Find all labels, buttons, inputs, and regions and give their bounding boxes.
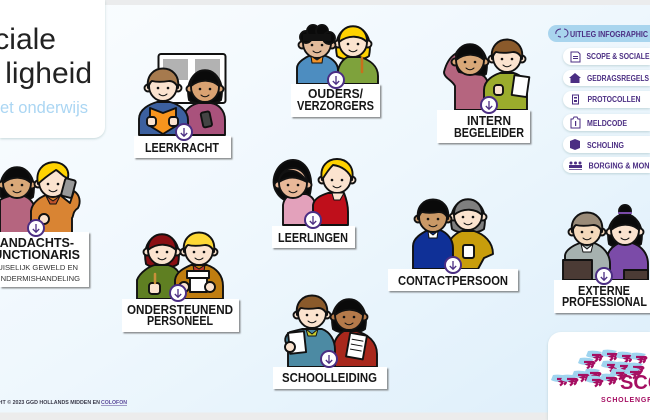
- group: ouders: [297, 25, 378, 84]
- person: woman bun: [606, 205, 648, 280]
- nav: uitleg infographic: [548, 25, 650, 42]
- icon: arrow leerlingen: [305, 212, 321, 228]
- label: ouders: VERZORGERS: [297, 99, 374, 113]
- person: woman: [0, 167, 36, 233]
- group: aandachtsfunctionaris: [0, 162, 80, 233]
- title: ligheid: [5, 57, 92, 90]
- label: ondersteunend personeel: [122, 299, 239, 332]
- person: woman grey hair: [450, 199, 493, 269]
- person: boy: [313, 159, 356, 225]
- label: leerlingen: [272, 226, 355, 248]
- heading: [0, 236, 80, 262]
- label: aandachtsfunctionaris: [0, 232, 89, 287]
- nav: scholing: SCHOLING: [587, 141, 624, 150]
- icon: arrow schoolleiding: [321, 351, 337, 367]
- label: leerlingen: LEERLINGEN: [278, 231, 348, 245]
- top band: [100, 0, 650, 5]
- nav: scholing: [563, 136, 650, 153]
- nav: gedragsregels: [563, 70, 650, 86]
- logo card: [548, 332, 650, 420]
- subtitle: et onderwijs: [0, 99, 88, 117]
- label: leerkracht: LEERKRACHT: [145, 141, 219, 155]
- label: intern begeleider: INTERN: [467, 114, 511, 128]
- label: intern begeleider: BEGELEIDER: [454, 126, 524, 140]
- nav: scope: [563, 48, 650, 65]
- group: schoolleiding: [285, 296, 377, 367]
- label: externe professional: [554, 280, 650, 313]
- icon: arrow aandachtsfunctionaris: [28, 220, 44, 236]
- navigation menu: [548, 25, 650, 173]
- label: ouders: [291, 84, 380, 117]
- group: contactpersoon: [413, 199, 493, 269]
- person: man: [285, 296, 335, 367]
- icon: arrow leerkracht: [176, 124, 192, 140]
- person: begeleider man: [484, 40, 529, 110]
- group: leerkracht: [139, 54, 226, 135]
- label: contactpersoon: [388, 269, 518, 291]
- copyright: [0, 399, 127, 406]
- person: woman red hair: [137, 234, 181, 299]
- nav: protocollen: [563, 91, 650, 108]
- nav: protocollen: PROTOCOLLEN: [588, 95, 641, 104]
- person: man grey: [563, 212, 610, 280]
- group: leerlingen: [274, 159, 356, 225]
- person: woman: [330, 299, 377, 367]
- label: intern begeleider: [437, 110, 530, 143]
- icon: arrow contactpersoon: [445, 257, 461, 273]
- title: [0, 23, 92, 90]
- group: externe professional: [563, 205, 648, 280]
- person: father: [297, 25, 338, 84]
- icon: arrow ouders: [328, 72, 344, 88]
- copyright: HT © 2023 GGD HOLLANDS MIDDEN EN: [0, 399, 100, 406]
- label: contactpersoon: CONTACTPERSOON: [398, 274, 508, 288]
- nav: meldcode: [563, 114, 650, 131]
- bottom band: [0, 412, 650, 420]
- person: mother: [334, 26, 378, 84]
- icon: arrow intern begeleider: [481, 97, 497, 113]
- nav: borging: [563, 157, 650, 173]
- label: leerkracht: [134, 136, 231, 158]
- copyright: COLOFON: [101, 400, 127, 406]
- group: ondersteunend personeel: [137, 232, 223, 299]
- label: ouders: OUDERS/: [308, 87, 364, 101]
- label: schoolleiding: SCHOOLLEIDING: [282, 371, 377, 385]
- icon: arrow ondersteunend personeel: [170, 285, 186, 301]
- label: schoolleiding: [273, 367, 387, 389]
- person: teacher woman: [184, 70, 225, 135]
- logo birds: [551, 350, 646, 386]
- icon: arrow externe professional: [596, 268, 612, 284]
- person: man with phone: [31, 162, 80, 233]
- person: pupil woman: [444, 44, 488, 110]
- subtext: NDERMISHANDELING: [1, 274, 80, 283]
- label: ondersteunend personeel: PERSONEEL: [147, 314, 213, 328]
- person: man black hair: [413, 200, 453, 269]
- title card: [0, 0, 105, 138]
- group: intern begeleider: [444, 40, 529, 110]
- person: man yellow hair: [175, 232, 223, 299]
- label: ondersteunend personeel: ONDERSTEUNEND: [127, 303, 233, 317]
- nav: meldcode: MELDCODE: [587, 119, 627, 128]
- whiteboard: [158, 54, 226, 103]
- person: teacher man: [139, 68, 188, 135]
- subtext: [0, 263, 80, 283]
- label: externe professional: EXTERNE: [578, 284, 630, 298]
- person: girl: [274, 160, 315, 225]
